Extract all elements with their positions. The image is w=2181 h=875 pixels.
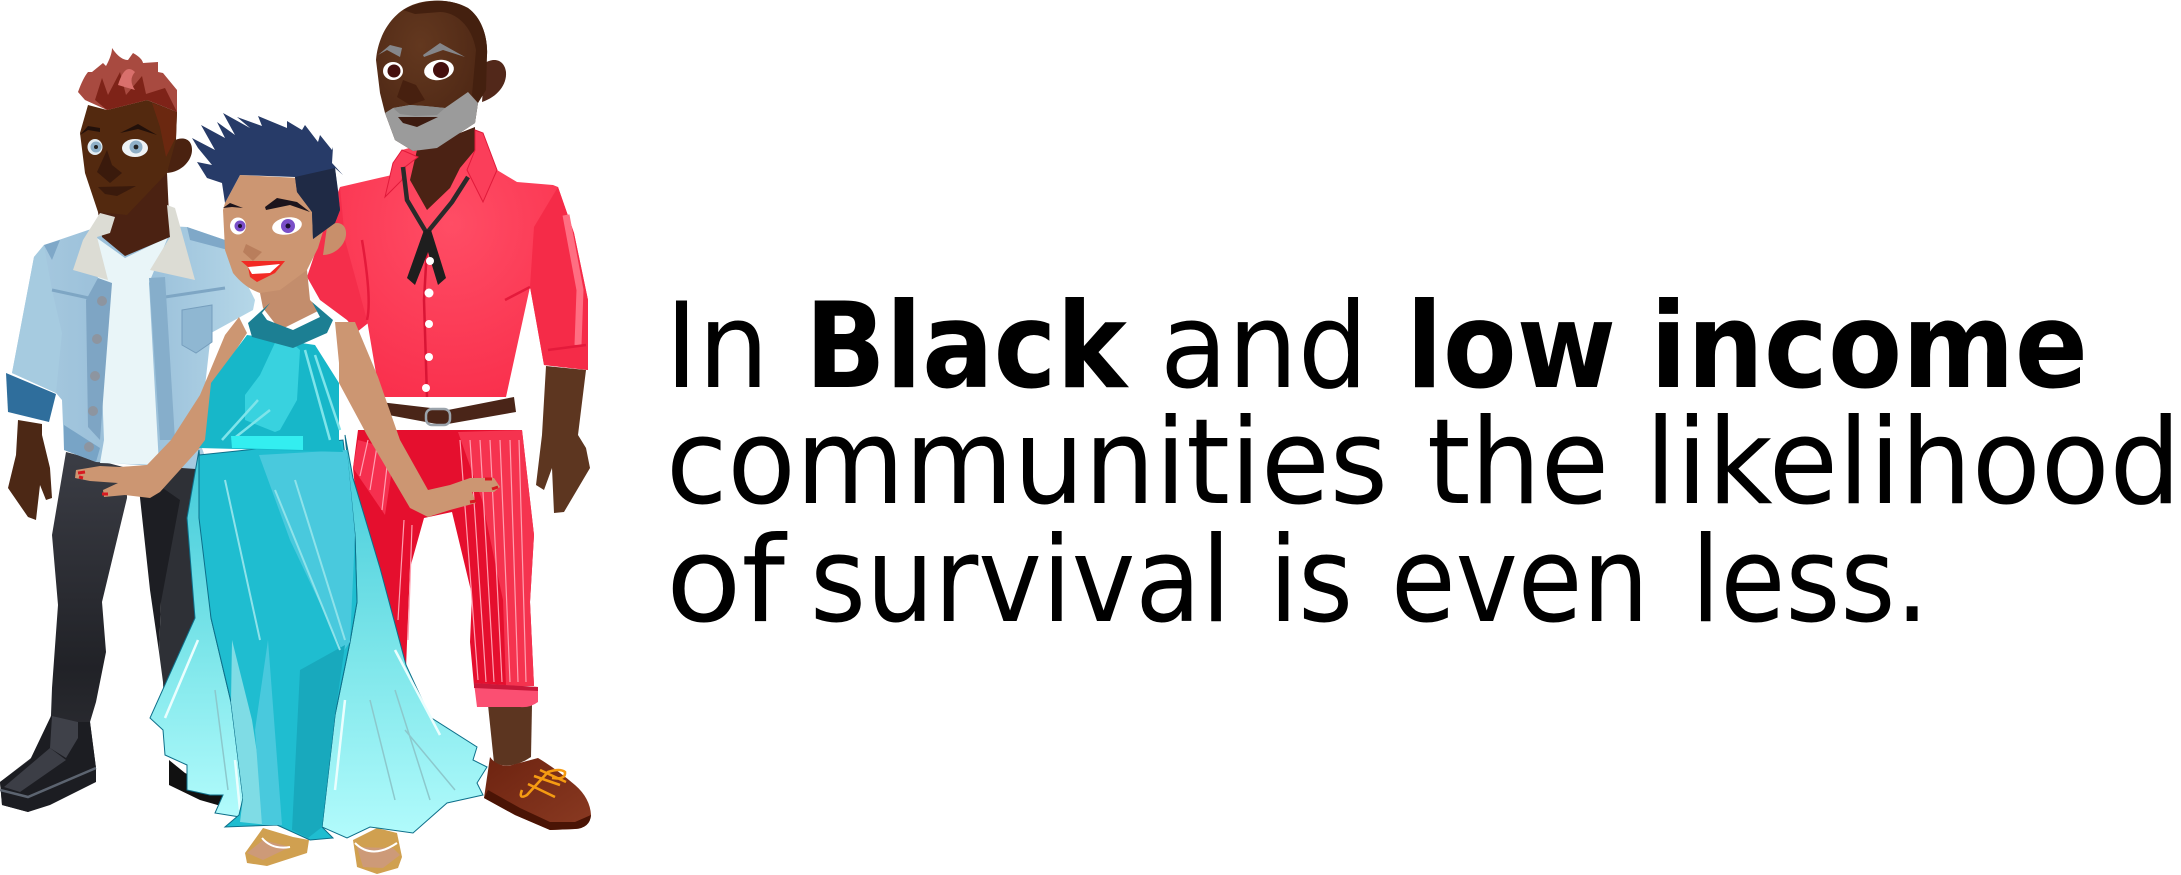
neck bbox=[410, 127, 475, 210]
left arm and hand bbox=[8, 420, 52, 520]
eyes bbox=[88, 139, 148, 157]
necklace: dark teal collar bbox=[248, 302, 333, 348]
headline text: of bbox=[666, 512, 788, 650]
trousers: red pinstripe bbox=[353, 430, 538, 707]
eyebrows bbox=[80, 124, 157, 135]
hair: navy spikes bbox=[192, 113, 343, 239]
headline text: is bbox=[1269, 512, 1353, 650]
nose bbox=[397, 80, 425, 105]
ear bbox=[167, 138, 192, 173]
t-shirt: white bbox=[97, 237, 168, 465]
neck bbox=[260, 270, 320, 330]
shoe: brown lace-up bbox=[484, 757, 591, 830]
arm: right bbox=[335, 322, 500, 517]
nose bbox=[243, 244, 262, 261]
headline text: In bbox=[665, 278, 769, 416]
collar bbox=[385, 130, 497, 202]
neck bbox=[98, 173, 170, 256]
eyes bbox=[230, 215, 303, 237]
face bbox=[223, 175, 325, 293]
collar: shearling bbox=[73, 205, 195, 280]
head bbox=[80, 100, 177, 215]
skirt: central panel bbox=[199, 440, 357, 840]
jacket placket bbox=[84, 277, 212, 452]
jacket: light denim bbox=[12, 226, 255, 470]
headline text: communities bbox=[666, 394, 1388, 532]
headline text: even bbox=[1391, 512, 1649, 650]
ear bbox=[482, 60, 506, 102]
far leg bbox=[137, 460, 200, 735]
cuff: rolled sleeve bbox=[6, 373, 56, 422]
near leg bbox=[0, 452, 127, 812]
far shoe bbox=[169, 760, 224, 806]
figure: woman in teal gown bbox=[75, 113, 500, 874]
headline text: the bbox=[1427, 394, 1609, 532]
eyebrows bbox=[378, 43, 465, 57]
belt: aqua sash bbox=[231, 436, 303, 450]
eyebrows bbox=[223, 198, 310, 212]
figure: older man in red shirt bbox=[307, 1, 591, 830]
headline text: Black bbox=[805, 278, 1130, 416]
shirt: coral red bbox=[340, 130, 588, 397]
mouth: red smile bbox=[241, 261, 285, 282]
necktie: black cord bbox=[403, 167, 468, 285]
bodice: teal ruffles bbox=[199, 332, 343, 452]
skirt: right panel bbox=[322, 435, 487, 838]
sandals bbox=[245, 828, 402, 874]
ear bbox=[323, 223, 346, 255]
headline text: low bbox=[1406, 278, 1616, 416]
shirt buttons bbox=[422, 257, 434, 392]
arm: left bbox=[75, 317, 247, 498]
eyes bbox=[383, 58, 456, 82]
headline text: and bbox=[1160, 278, 1368, 416]
head: bald bbox=[376, 1, 487, 151]
belt bbox=[380, 397, 516, 425]
nails bbox=[78, 472, 498, 502]
headline text: income bbox=[1650, 278, 2088, 416]
headline text bbox=[665, 278, 2181, 650]
boot bbox=[0, 716, 96, 812]
illustration: three people bbox=[0, 1, 591, 874]
skirt: left panel bbox=[150, 450, 243, 817]
headline text: less. bbox=[1691, 512, 1929, 650]
forearm and hand bbox=[536, 366, 590, 513]
nose and mouth bbox=[97, 150, 136, 196]
skirt: folds bbox=[165, 640, 440, 810]
hair: red quiff bbox=[78, 48, 177, 112]
mouth bbox=[398, 117, 438, 127]
arm: far sleeve bbox=[307, 187, 372, 332]
figure: young man in denim jacket bbox=[0, 48, 255, 812]
beard: grey bbox=[385, 92, 478, 151]
headline text: survival bbox=[810, 512, 1231, 650]
ankle bbox=[488, 705, 532, 765]
